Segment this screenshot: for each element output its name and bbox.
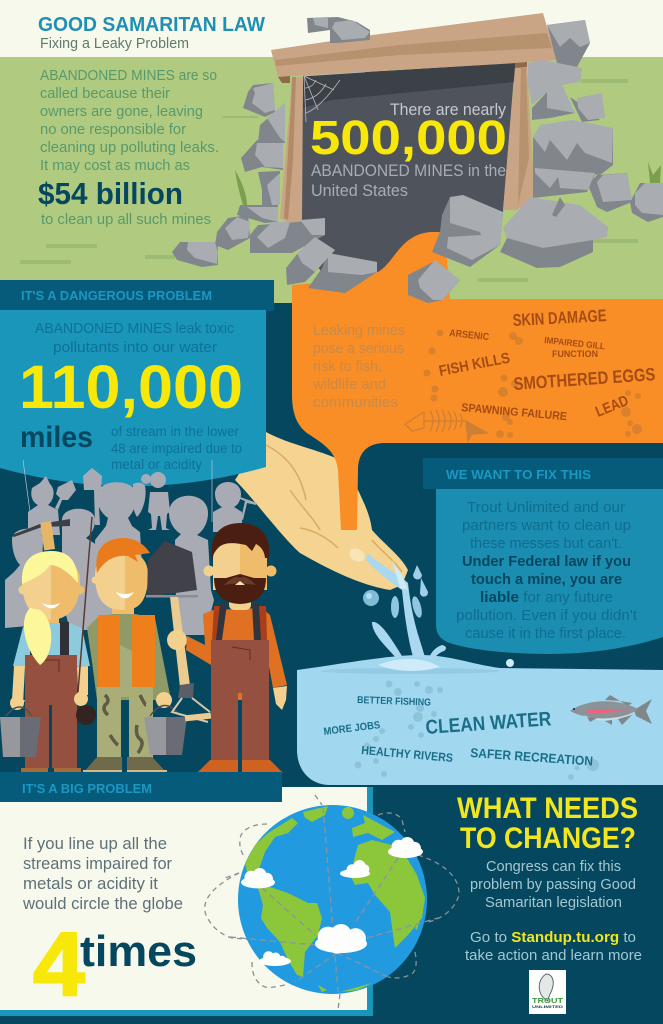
- icon: globe: [205, 795, 459, 1010]
- icon: pickaxe: [12, 519, 70, 551]
- panel: dangerous problem: of stream in the lower: [111, 424, 239, 439]
- fishing line hints: [23, 460, 212, 522]
- icon: trout: [570, 695, 652, 725]
- header: it's a dangerous problem: [0, 280, 274, 311]
- logo: trout unlimited: [529, 970, 566, 1014]
- water pool panel: [297, 655, 663, 785]
- intro text block: [38, 68, 219, 228]
- header: it's a big problem: IT'S A BIG PROBLEM: [22, 781, 152, 796]
- icon: bucket: [0, 707, 41, 757]
- water stream from fingers: [363, 553, 514, 667]
- what needs to change heading: [457, 792, 638, 855]
- intro text block: to clean up all such mines: [41, 212, 211, 228]
- panel: big problem: 4: [33, 915, 85, 1015]
- call to action text: Samaritan legislation: [485, 894, 622, 911]
- panel: dangerous problem: miles: [20, 421, 93, 454]
- intro text block: called because their: [40, 86, 170, 102]
- call to action text: [465, 858, 642, 964]
- intro text block: no one responsible for: [40, 122, 186, 138]
- water bubbles: [354, 680, 599, 780]
- panel: we want to fix this: pollution. Even if you didn't: [456, 607, 638, 624]
- call to action text: problem by passing Good: [470, 876, 636, 893]
- panel: we want to fix this: touch a mine, you are: [471, 571, 622, 588]
- panel: big problem: would circle the globe: [22, 895, 183, 913]
- icon: shovel: [146, 541, 211, 722]
- person: woman: [0, 519, 90, 774]
- text: 500,000 abandoned mines: United States: [311, 182, 408, 200]
- text: 500,000 abandoned mines: [310, 100, 507, 200]
- panel: we want to fix this: cause it in the first place.: [465, 625, 626, 642]
- benefit words: MORE JOBS: [323, 719, 381, 738]
- intro text block: owners are gone, leaving: [40, 104, 203, 120]
- text: leaking mines: [312, 323, 405, 411]
- text: leaking mines: pose a serious: [313, 341, 404, 357]
- panel: dangerous problem: 110,000: [19, 353, 243, 421]
- header: we want to fix this: [423, 458, 663, 489]
- panel: big problem: metals or acidity it: [23, 875, 158, 893]
- intro text block: $54 billion: [38, 176, 183, 211]
- pollutant words: SPAWNING FAILURE: [461, 402, 568, 423]
- call to action text: Go to Standup.tu.org to: [470, 929, 636, 946]
- intro text block: ABANDONED MINES are so: [40, 68, 217, 84]
- panel: dangerous problem: ABANDONED MINES leak toxic: [35, 321, 234, 337]
- title: GOOD SAMARITAN LAW: [38, 14, 265, 36]
- clouds: [241, 837, 423, 966]
- pollutant words: [438, 306, 656, 423]
- text: 500,000 abandoned mines: 500,000: [310, 112, 507, 165]
- text: leaking mines: wildlife and: [312, 377, 386, 393]
- pollutant words: IMPAIRED GILL: [544, 335, 606, 351]
- call to action text: Congress can fix this: [486, 858, 621, 875]
- pollutant words: SKIN DAMAGE: [512, 306, 607, 330]
- cobweb: [304, 72, 365, 122]
- pollutant words: FISH KILLS: [438, 350, 511, 380]
- rock pile: [172, 17, 663, 303]
- pollutant droplets: [424, 330, 642, 438]
- call to action text: take action and learn more: [465, 947, 642, 964]
- green landscape panel: [0, 57, 663, 303]
- panel: big problem: If you line up all the: [23, 835, 167, 853]
- crowd silhouettes: [5, 468, 257, 635]
- intro text block: cleaning up polluting leaks.: [40, 140, 219, 156]
- panel: big problem: times: [80, 927, 197, 976]
- panel: we want to fix this: Under Federal law if you: [462, 553, 631, 570]
- title: [38, 14, 265, 52]
- text: 500,000 abandoned mines: ABANDONED MINES in the: [311, 162, 506, 180]
- panel: dangerous problem: 48 are impaired due to: [111, 441, 242, 456]
- orange leak panel: [292, 232, 663, 530]
- panel: we want to fix this: liable for any future: [480, 589, 613, 606]
- what needs to change heading: WHAT NEEDS: [457, 792, 638, 825]
- panel: we want to fix this: these messes but can't.: [470, 535, 622, 552]
- header: it's a big problem: [0, 772, 282, 802]
- abandoned mine entrance: [271, 13, 557, 285]
- icon: fishing rod: [76, 517, 96, 725]
- title: Fixing a Leaky Problem: [40, 36, 189, 52]
- header: we want to fix this: WE WANT TO FIX THIS: [446, 467, 591, 482]
- header: it's a dangerous problem: IT'S A DANGEROUS PROBLEM: [21, 288, 212, 303]
- pollutant words: FUNCTION: [552, 349, 598, 359]
- text: leaking mines: Leaking mines: [313, 323, 405, 339]
- panel: dangerous problem: metal or acidity: [111, 457, 202, 472]
- benefit words: CLEAN WATER: [425, 708, 553, 739]
- panel: big problem: streams impaired for: [23, 855, 172, 873]
- person: man in orange vest: [83, 538, 187, 773]
- what needs to change heading: TO CHANGE?: [460, 822, 636, 855]
- panel: we want to fix this: Trout Unlimited and our: [467, 499, 625, 516]
- benefit words: BETTER FISHING: [357, 695, 431, 709]
- person: bearded man with shovel: [146, 523, 287, 773]
- text: leaking mines: risk to fish,: [313, 359, 382, 375]
- logo: trout unlimited: TROUT: [532, 998, 564, 1005]
- panel: big problem: [0, 787, 373, 1016]
- fish skeleton: [405, 410, 487, 441]
- logo: trout unlimited: UNLIMITED: [532, 1004, 563, 1009]
- panel: we want to fix this: [436, 489, 663, 654]
- text: leaking mines: communities: [313, 395, 398, 411]
- pollutant words: LEAD: [593, 392, 631, 421]
- hand: [235, 432, 408, 590]
- benefit words: SAFER RECREATION: [470, 745, 594, 769]
- benefit words: [323, 695, 594, 769]
- pollutant words: ARSENIC: [449, 328, 490, 343]
- text: 500,000 abandoned mines: There are nearly: [390, 100, 506, 119]
- benefit words: HEALTHY RIVERS: [361, 743, 454, 765]
- panel: dangerous problem: pollutants into our water: [53, 340, 217, 356]
- icon: bucket: [144, 706, 187, 755]
- panel: dangerous problem: [0, 310, 266, 486]
- panel: we want to fix this: partners want to clean up: [462, 517, 631, 534]
- intro text block: It may cost as much as: [40, 158, 190, 174]
